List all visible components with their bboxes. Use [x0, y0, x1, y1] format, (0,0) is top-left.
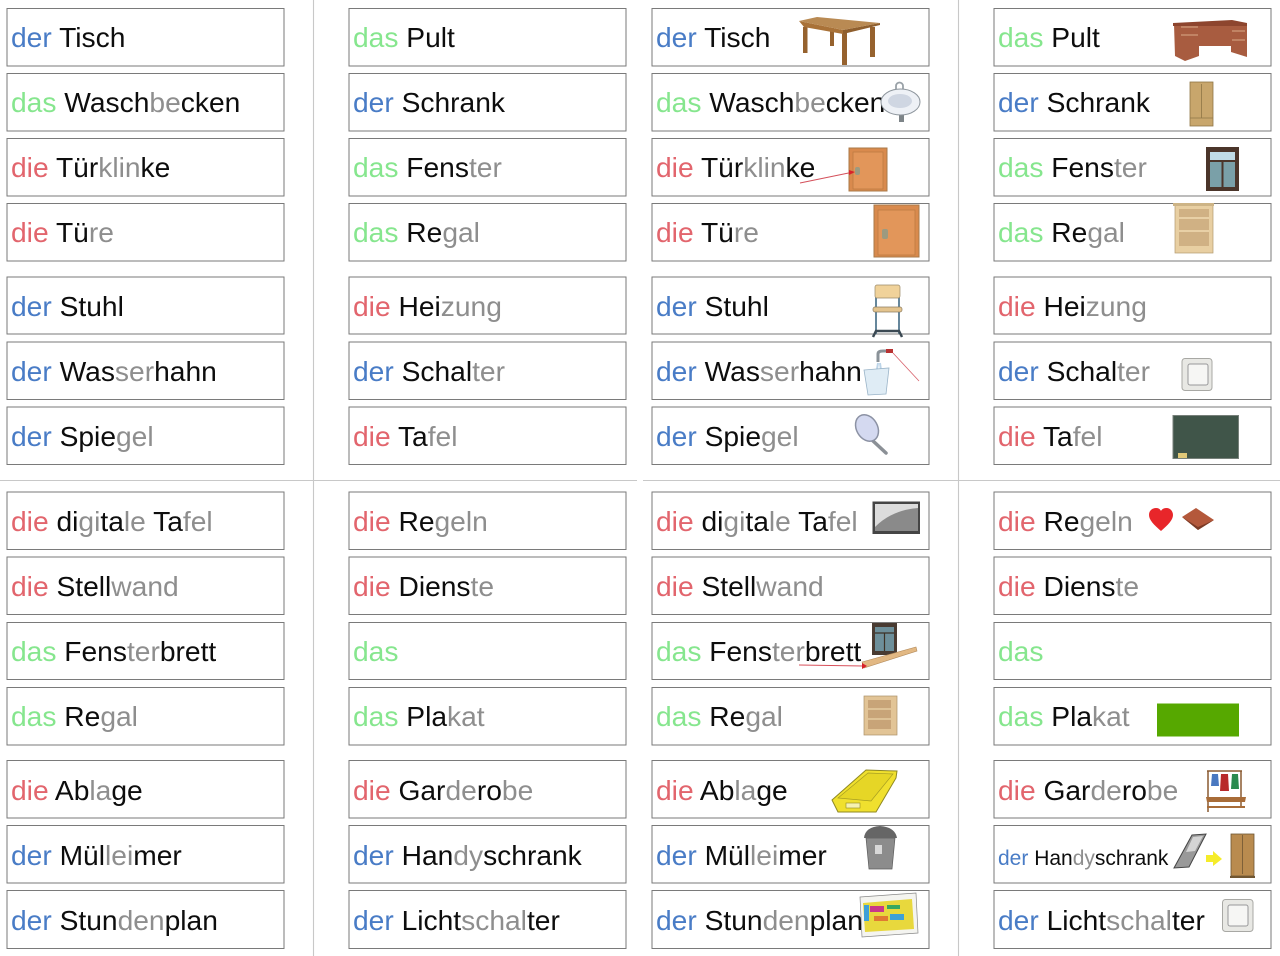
card: die Tafel: die Tafel	[353, 420, 458, 452]
card: die Heizung: die Heizung	[353, 290, 502, 322]
card: das Fenster with window: das Fenster	[998, 151, 1147, 183]
icon: window	[1206, 147, 1239, 191]
card: das Regal	[7, 688, 284, 745]
card: der Stundenplan	[7, 890, 284, 948]
card: der Handyschrank	[349, 826, 626, 883]
card: das Regal with shelf: das Regal	[998, 216, 1125, 248]
card: der Wasserhahn: der Wasserhahn	[11, 355, 217, 387]
icon: light switch	[1222, 900, 1253, 932]
card: die Garderobe: die Garderobe	[353, 774, 533, 806]
icon: water tap and glass	[864, 349, 919, 395]
icon: mobile phone	[1174, 834, 1206, 868]
icon: digital board	[872, 502, 920, 534]
card: das Pult with desk: das Pult	[998, 21, 1100, 53]
card: das (empty): das	[353, 635, 398, 667]
icon: blackboard	[1173, 416, 1238, 458]
card: der Spiegel	[7, 407, 284, 464]
card: der Stundenplan: der Stundenplan	[11, 904, 218, 936]
icon: light switch	[1182, 358, 1212, 390]
card: das Regal	[349, 204, 626, 261]
card: der Handyschrank with phone, arrow, wardrobe: der Handyschrank	[998, 847, 1169, 870]
icon: wardrobe	[1190, 82, 1213, 126]
card: das Fenster: das Fenster	[353, 151, 502, 183]
icon: chair	[873, 285, 902, 337]
arrow: yellow arrow	[1206, 851, 1222, 866]
card: die Türklinke	[7, 138, 284, 196]
card: der Mülleimer	[7, 826, 284, 883]
card: das Waschbecken with sink	[652, 74, 929, 131]
card: das Fensterbrett with window sill	[652, 622, 929, 680]
card: die Türe: die Türe	[11, 216, 114, 248]
card: das Waschbecken	[7, 74, 284, 131]
card: die Stellwand	[7, 557, 284, 614]
icon: shelf	[864, 696, 897, 735]
icon: timetable poster	[860, 893, 918, 937]
card: die digitale Tafel with screen	[652, 492, 929, 550]
card: die Ablage with tray: die Ablage	[656, 774, 788, 806]
card: das Waschbecken: das Waschbecken	[11, 86, 240, 118]
icon: door with handle	[849, 148, 887, 191]
card: der Schrank: der Schrank	[353, 86, 506, 118]
icon: coat rack	[1206, 771, 1246, 812]
card: der Stundenplan with timetable: der Stundenplan	[656, 904, 863, 936]
card: der Lichtschalter	[349, 890, 626, 948]
card: der Schrank	[349, 74, 626, 131]
card: das Regal with shelf: das Regal	[656, 700, 783, 732]
panel: column 4 words with pictures	[994, 8, 1271, 948]
icon: green poster	[1157, 704, 1239, 736]
card: die Türklinke with door and arrow	[652, 138, 929, 196]
card: die Stellwand	[652, 557, 929, 614]
card: das Regal: das Regal	[11, 700, 138, 732]
card: das Fensterbrett with window sill: das Fensterbrett	[656, 635, 861, 667]
card: der Tisch with table	[652, 8, 929, 66]
card: die Tafel with blackboard: die Tafel	[998, 420, 1102, 452]
card: die Ablage	[7, 760, 284, 818]
card: der Stuhl	[7, 277, 284, 334]
card: der Schalter	[349, 342, 626, 400]
card: der Lichtschalter: der Lichtschalter	[353, 904, 560, 936]
icon: waste bin	[864, 826, 897, 869]
card: der Wasserhahn	[7, 342, 284, 400]
card: der Stuhl: der Stuhl	[11, 290, 124, 322]
card: der Wasserhahn with tap	[652, 342, 929, 400]
card: der Spiegel with mirror: der Spiegel	[656, 420, 799, 452]
card: das Fensterbrett: das Fensterbrett	[11, 635, 216, 667]
card: das Regal with shelf	[652, 688, 929, 745]
icon: sink	[881, 83, 920, 122]
card: die Garderobe with coat rack: die Garderobe	[998, 774, 1178, 806]
card: der Schrank with wardrobe: der Schrank	[998, 86, 1151, 118]
card: die Türe	[7, 204, 284, 261]
card: der Mülleimer: der Mülleimer	[11, 839, 182, 871]
card: das (empty)	[994, 622, 1271, 680]
card: das Waschbecken with sink: das Waschbecken	[656, 86, 885, 118]
card: der Lichtschalter with switch	[994, 890, 1271, 948]
card: das Pult with desk	[994, 8, 1271, 66]
card: die Dienste	[349, 557, 626, 614]
card: die digitale Tafel with screen: die digitale Tafel	[656, 505, 858, 537]
card: die Tafel with blackboard	[994, 407, 1271, 464]
icon: table	[799, 17, 880, 65]
card: das Regal: das Regal	[353, 216, 480, 248]
panel: column 1 words	[7, 8, 284, 948]
card: der Tisch: der Tisch	[11, 21, 125, 53]
card: der Mülleimer with bin	[652, 826, 929, 883]
card: die Türklinke: die Türklinke	[11, 151, 170, 183]
icon: heart	[1149, 508, 1173, 531]
card: der Tisch	[7, 8, 284, 66]
card: der Handyschrank with phone, arrow, wardrobe	[994, 826, 1271, 883]
card: die digitale Tafel: die digitale Tafel	[11, 505, 213, 537]
card: die Ablage with tray	[652, 760, 929, 818]
card: der Spiegel: der Spiegel	[11, 420, 154, 452]
card: die Heizung	[349, 277, 626, 334]
card: der Lichtschalter with switch: der Lichtschalter	[998, 904, 1205, 936]
icon: teacher desk	[1173, 20, 1247, 61]
icon: hand mirror	[851, 411, 886, 453]
card: die Dienste: die Dienste	[353, 570, 494, 602]
card: die Dienste	[994, 557, 1271, 614]
icon: shelf	[1173, 203, 1214, 253]
card: das Fensterbrett	[7, 622, 284, 680]
card: der Schrank with wardrobe	[994, 74, 1271, 131]
icon: wardrobe	[1230, 834, 1255, 878]
card: das Fenster	[349, 138, 626, 196]
card: die digitale Tafel	[7, 492, 284, 550]
card: die Ablage: die Ablage	[11, 774, 143, 806]
card: die Tafel	[349, 407, 626, 464]
card: das Plakat: das Plakat	[353, 700, 485, 732]
card: der Schalter: der Schalter	[353, 355, 505, 387]
card: die Regeln: die Regeln	[353, 505, 488, 537]
card: das (empty)	[349, 622, 626, 680]
card: die Heizung: die Heizung	[998, 290, 1147, 322]
card: der Mülleimer with bin: der Mülleimer	[656, 839, 827, 871]
card: der Wasserhahn with tap: der Wasserhahn	[656, 355, 862, 387]
card: die Stellwand: die Stellwand	[656, 570, 824, 602]
card: das Regal with shelf	[994, 203, 1271, 261]
card: die Regeln with heart and book	[994, 492, 1271, 550]
icon: door	[874, 205, 919, 257]
card: der Spiegel with mirror	[652, 407, 929, 464]
card: das Pult	[349, 8, 626, 66]
card: die Heizung	[994, 277, 1271, 334]
card: die Türklinke with door and arrow: die Türklinke	[656, 151, 815, 183]
card: das Pult: das Pult	[353, 21, 455, 53]
card: der Stuhl with chair: der Stuhl	[656, 290, 769, 322]
panel: column 2 words	[349, 8, 626, 948]
card: das Plakat	[349, 688, 626, 745]
card: der Stundenplan with timetable	[652, 890, 929, 948]
card: die Garderobe with coat rack	[994, 760, 1271, 818]
icon: yellow tray	[832, 770, 897, 812]
card: die Regeln	[349, 492, 626, 550]
arrow: underline pointing to sill	[799, 663, 867, 669]
card: die Regeln with heart and book: die Regeln	[998, 505, 1133, 537]
card: das (empty): das	[998, 635, 1043, 667]
card: die Türe with door	[652, 204, 929, 261]
panel: column 3 words with pictures	[652, 8, 929, 948]
card: der Schalter with switch: der Schalter	[998, 355, 1150, 387]
card: die Türe with door: die Türe	[656, 216, 759, 248]
card: das Plakat with green poster: das Plakat	[998, 700, 1130, 732]
card: der Handyschrank: der Handyschrank	[353, 839, 583, 871]
card: die Stellwand: die Stellwand	[11, 570, 179, 602]
card: der Stuhl with chair	[652, 277, 929, 337]
card: der Tisch with table: der Tisch	[656, 21, 770, 53]
icon: book	[1182, 508, 1214, 530]
card: der Schalter with switch	[994, 342, 1271, 400]
card: das Fenster with window	[994, 138, 1271, 196]
card: das Plakat with green poster	[994, 688, 1271, 745]
card: die Dienste: die Dienste	[998, 570, 1139, 602]
card: die Garderobe	[349, 760, 626, 818]
icon: window with sill	[862, 623, 917, 668]
arrow: pointer to door handle	[800, 170, 855, 183]
